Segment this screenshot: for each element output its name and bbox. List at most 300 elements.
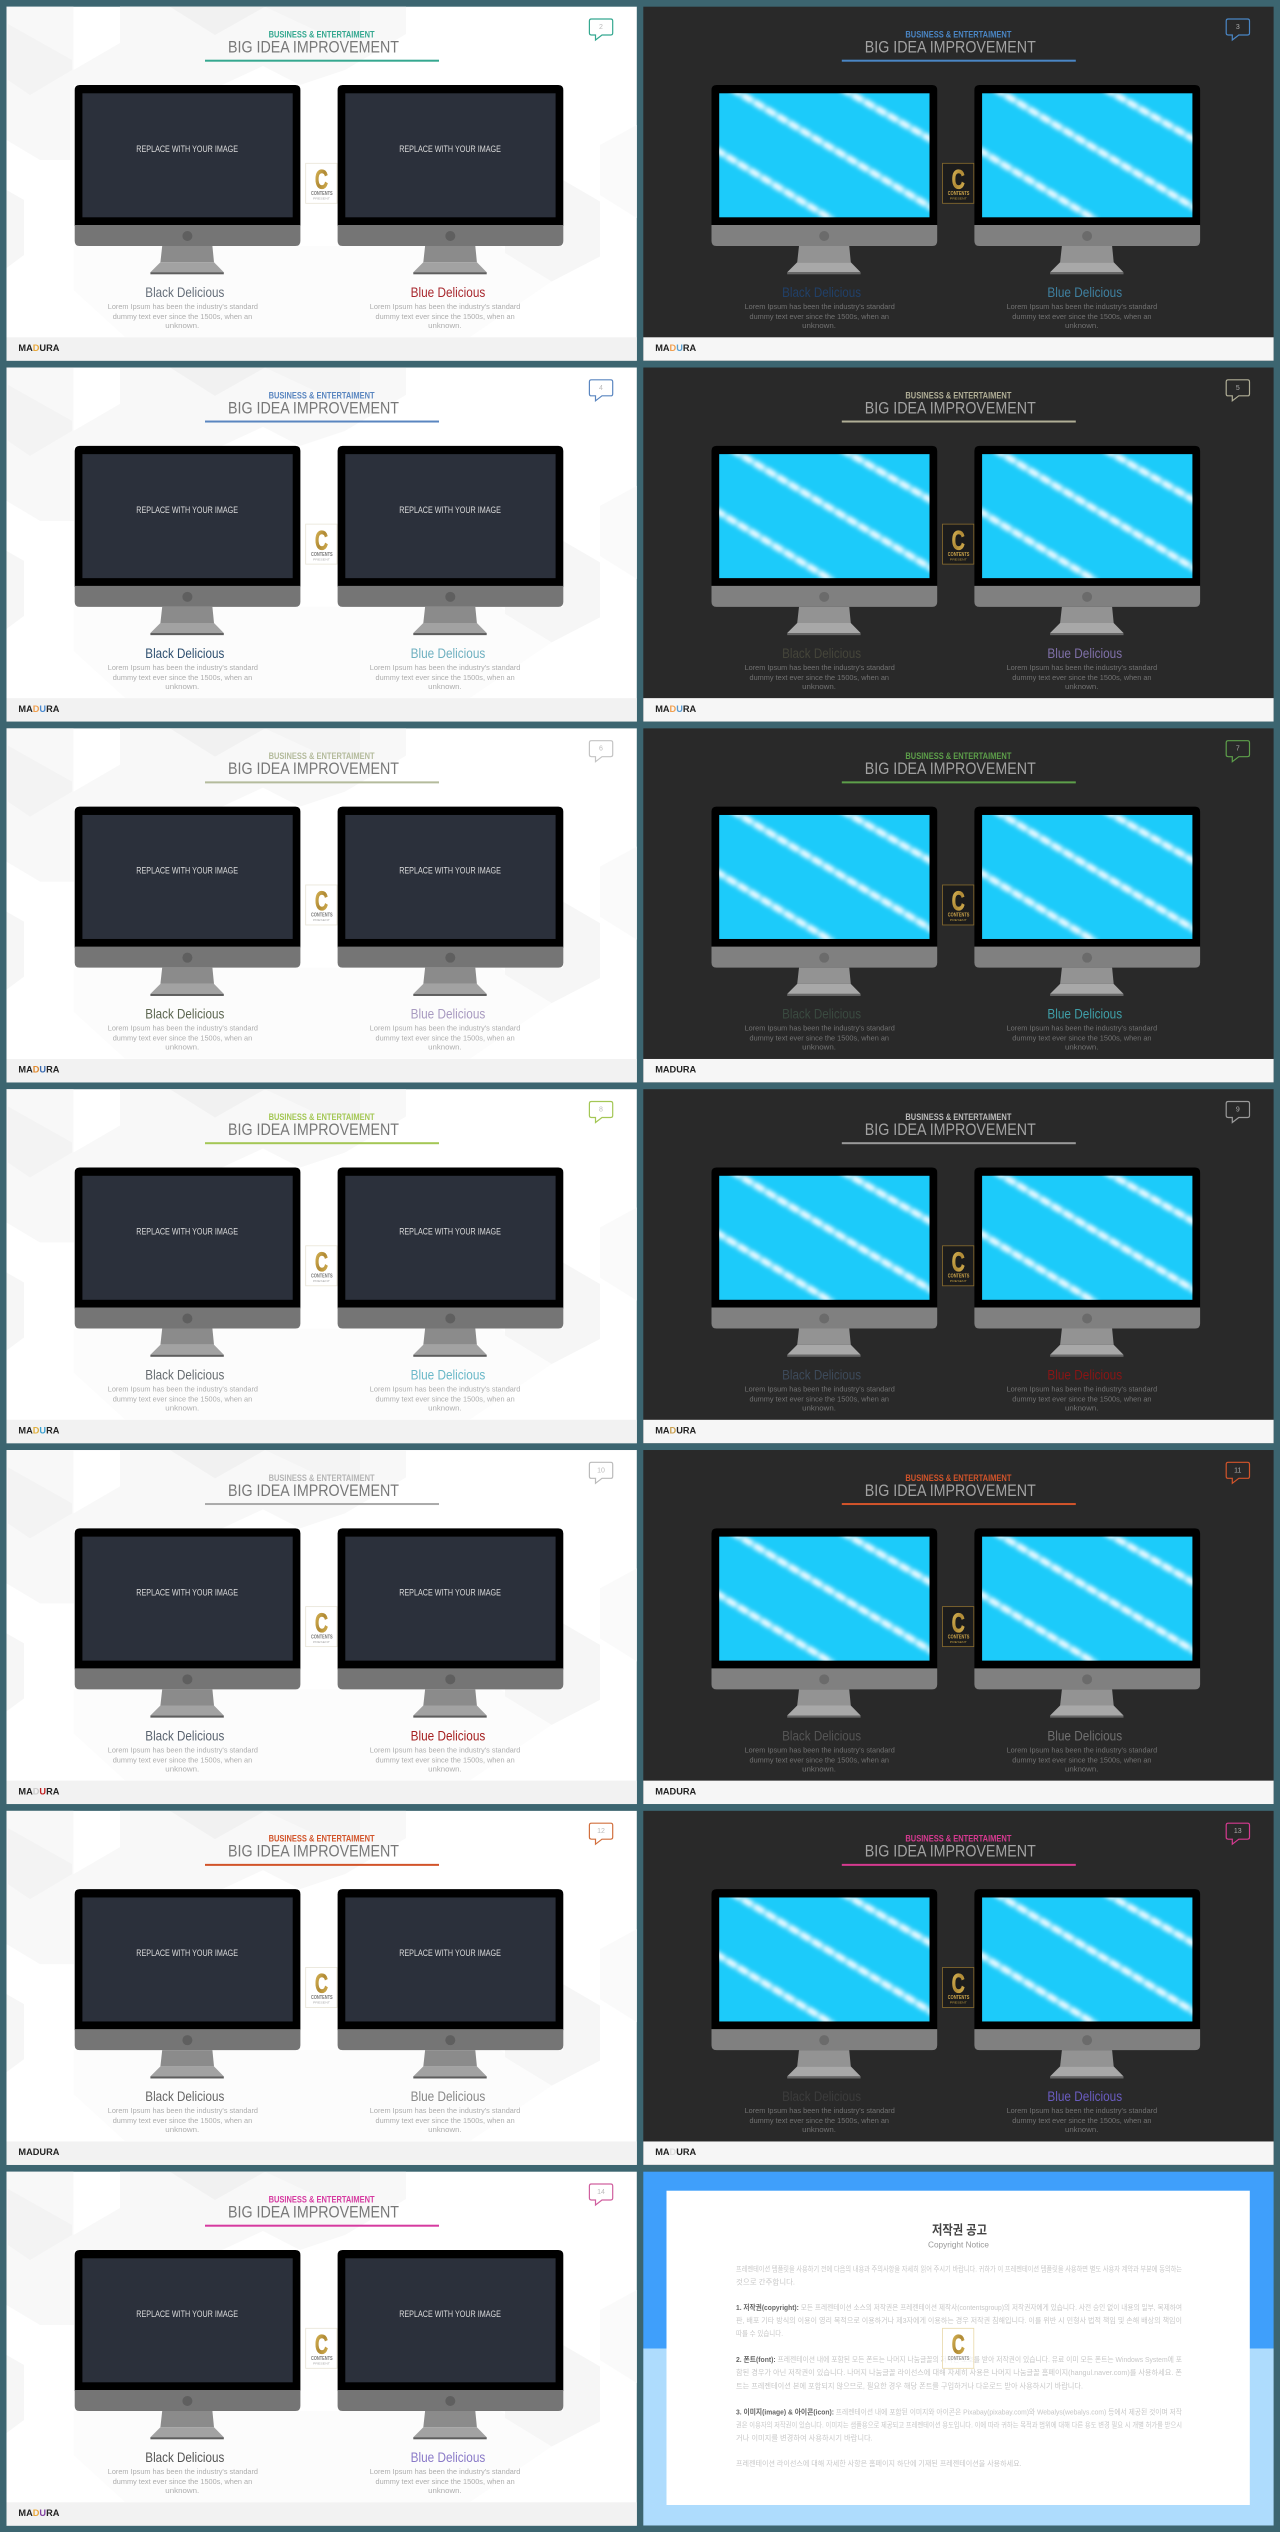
heading: slide 5 title <box>842 390 1076 423</box>
monitor left: REPLACE WITH YOUR IMAGE <box>136 505 238 515</box>
caption right: unknown. <box>428 2486 462 2495</box>
monitor right <box>338 1528 563 1718</box>
caption right: unknown. <box>428 682 462 691</box>
caption right <box>370 1366 520 1412</box>
caption right: Lorem Ipsum has been the industry's standard <box>1007 1384 1157 1394</box>
heading: slide 12 title <box>205 1834 439 1866</box>
icon: contents logo: C <box>952 1247 965 1277</box>
caption right: dummy text ever since the 1500s, when an <box>1012 1034 1152 1043</box>
caption right: dummy text ever since the 1500s, when an <box>376 312 515 321</box>
caption right <box>1007 2088 1157 2134</box>
caption left: Lorem Ipsum has been the industry's standard <box>108 1384 258 1394</box>
heading: slide 7 title: BUSINESS & ENTERTAIMENT <box>905 751 1012 761</box>
icon: contents logo: PRESENT <box>313 557 330 561</box>
icon: page number bubble 8: 8 <box>599 1106 603 1114</box>
caption left: Black Delicious <box>782 284 861 300</box>
caption left <box>108 645 258 691</box>
caption left: dummy text ever since the 1500s, when an <box>113 2116 252 2125</box>
heading: slide 14 title: BUSINESS & ENTERTAIMENT <box>269 2194 375 2204</box>
icon: contents logo <box>942 1607 974 1647</box>
icon: contents logo: C <box>315 886 328 916</box>
caption left: unknown. <box>802 682 836 691</box>
text block: intro <box>736 2264 1182 2286</box>
panel: slide 14 <box>6 2172 637 2526</box>
monitor left <box>712 85 937 274</box>
caption left: dummy text ever since the 1500s, when an <box>113 1394 252 1404</box>
monitor right <box>974 85 1200 274</box>
caption left: dummy text ever since the 1500s, when an <box>113 312 252 321</box>
caption right: Blue Delicious <box>411 2449 485 2465</box>
caption left: unknown. <box>802 2125 836 2134</box>
caption right: dummy text ever since the 1500s, when an <box>376 673 515 682</box>
icon: page number bubble 2 <box>589 19 613 40</box>
monitor right: REPLACE WITH YOUR IMAGE <box>399 144 501 154</box>
monitor left <box>712 446 937 635</box>
heading: slide 12 title: BUSINESS & ENTERTAIMENT <box>269 1834 375 1844</box>
caption left: Black Delicious <box>145 1727 224 1743</box>
caption left <box>745 284 895 330</box>
caption left: unknown. <box>165 1764 199 1773</box>
heading: slide 14 title: BIG IDEA IMPROVEMENT <box>228 2204 399 2222</box>
caption right <box>1007 645 1157 691</box>
caption right: Lorem Ipsum has been the industry's standard <box>370 2467 520 2476</box>
caption left: Black Delicious <box>145 2088 224 2104</box>
caption left: Lorem Ipsum has been the industry's standard <box>745 1745 895 1754</box>
monitor left <box>712 1528 937 1718</box>
monitor right: REPLACE WITH YOUR IMAGE <box>399 2309 501 2319</box>
icon: contents logo: C <box>315 164 328 194</box>
icon: contents logo: CONTENTS <box>311 552 333 558</box>
heading: slide 13 title: BUSINESS & ENTERTAIMENT <box>905 1834 1012 1844</box>
icon: contents logo: PRESENT <box>313 196 330 200</box>
heading: slide 4 title: BUSINESS & ENTERTAIMENT <box>269 390 375 400</box>
text block: intro: 것으로 간주합니다. <box>736 2276 795 2286</box>
heading: slide 11 title: BIG IDEA IMPROVEMENT <box>865 1482 1036 1500</box>
caption right: Blue Delicious <box>1047 2088 1122 2104</box>
caption right: Blue Delicious <box>1047 645 1122 661</box>
panel: slide 5 <box>643 368 1274 722</box>
icon: page number bubble 13: 13 <box>1234 1828 1242 1835</box>
heading: slide 7 title <box>842 751 1076 783</box>
caption left: dummy text ever since the 1500s, when an <box>749 1034 889 1043</box>
caption right: Blue Delicious <box>1047 284 1122 300</box>
monitor right <box>338 85 563 274</box>
heading: slide 2 title: BUSINESS & ENTERTAIMENT <box>269 30 375 40</box>
icon: page number bubble 6 <box>589 741 613 762</box>
caption left <box>108 2088 258 2134</box>
caption left <box>108 1727 258 1773</box>
icon: contents logo <box>942 1967 974 2007</box>
icon: contents logo <box>306 2328 337 2368</box>
caption right: Blue Delicious <box>1047 1366 1122 1382</box>
monitor left: REPLACE WITH YOUR IMAGE <box>136 1226 238 1236</box>
monitor right <box>974 446 1200 635</box>
panel: slide 13 <box>643 1811 1274 2165</box>
icon: page number bubble 9: 9 <box>1236 1106 1240 1114</box>
caption left: Lorem Ipsum has been the industry's standard <box>108 1024 258 1033</box>
icon: page number bubble 5: 5 <box>1236 385 1240 392</box>
icon: page number bubble 9 <box>1226 1102 1250 1122</box>
monitor left: REPLACE WITH YOUR IMAGE <box>136 144 238 154</box>
caption left: unknown. <box>165 682 199 691</box>
caption right: unknown. <box>1065 1043 1098 1052</box>
monitor left <box>75 1889 300 2078</box>
caption left: Black Delicious <box>145 1366 224 1382</box>
footer logo: MADURA <box>655 1426 696 1436</box>
icon: contents logo <box>306 1246 337 1286</box>
caption right: Blue Delicious <box>1047 1006 1122 1022</box>
icon: contents logo: C <box>315 1247 328 1277</box>
monitor right <box>338 446 563 635</box>
icon: contents logo: C <box>315 2330 328 2360</box>
heading: slide 9 title: BUSINESS & ENTERTAIMENT <box>905 1112 1012 1122</box>
caption left: Black Delicious <box>782 1727 861 1743</box>
icon: page number bubble 10: 10 <box>597 1467 605 1474</box>
text block: image and icon clause <box>736 2406 1182 2442</box>
caption right: unknown. <box>1065 1764 1098 1773</box>
footer logo: MADURA <box>18 2508 60 2519</box>
icon: contents logo <box>942 1246 974 1286</box>
caption left: Black Delicious <box>145 1006 224 1022</box>
caption right: dummy text ever since the 1500s, when an <box>1012 2116 1152 2125</box>
caption left <box>745 2088 895 2134</box>
icon: page number bubble 5 <box>1226 380 1250 401</box>
icon: page number bubble 11: 11 <box>1234 1467 1242 1474</box>
panel: white notice card <box>666 2191 1250 2505</box>
caption right <box>370 2449 520 2495</box>
footer logo: MADURA <box>18 1786 60 1797</box>
caption right: unknown. <box>1065 321 1098 330</box>
caption right <box>370 2088 520 2134</box>
icon: page number bubble 7: 7 <box>1236 746 1240 753</box>
icon: contents logo: PRESENT <box>950 1279 967 1283</box>
monitor right <box>338 1889 563 2078</box>
icon: page number bubble 4 <box>589 380 613 401</box>
monitor left <box>75 1168 300 1357</box>
icon: page number bubble 10 <box>589 1462 613 1483</box>
heading: slide 6 title: BIG IDEA IMPROVEMENT <box>228 760 399 778</box>
monitor right: REPLACE WITH YOUR IMAGE <box>399 505 501 515</box>
heading: slide 3 title: BIG IDEA IMPROVEMENT <box>865 38 1036 56</box>
caption right: Blue Delicious <box>411 284 485 300</box>
caption left: dummy text ever since the 1500s, when an <box>749 1755 889 1764</box>
caption right: dummy text ever since the 1500s, when an <box>376 1755 515 1764</box>
heading: slide 3 title: BUSINESS & ENTERTAIMENT <box>905 30 1012 40</box>
text block: font clause: 함된 경우가 아닌 저작권이 있습니다. 나머지 나눔글꼴 라이선스에 대해 자세히 사용은 나머지 나눔글꼴 홈페이지(hangul.naver.com)를 사용하세요. 폰 <box>736 2367 1182 2377</box>
text block: image and icon clause: 3. 이미지(image) & 아이콘(icon): 프레젠테이션 내에 포함된 이미지와 아이콘은 Pixabay(pixabay.com)와 Webalys(webalys.com) 등에서 제공된 것이며 저작 <box>736 2406 1182 2416</box>
caption right: Blue Delicious <box>411 1006 485 1022</box>
text block: image and icon clause: 권은 이용자의 저작권이 있습니다. 이미지는 샘플용으로 제공되고 프레젠테이션 용도입니다. 이에 따라 귀하는 목적과 범위에 대해 다른 용도 변경 필요 시 개별 허가를 받으시 <box>736 2420 1182 2430</box>
caption left: unknown. <box>802 1043 836 1052</box>
footer logo: MADURA <box>18 704 60 715</box>
icon: page number bubble 13 <box>1226 1823 1250 1844</box>
footer logo: MADURA <box>18 343 60 354</box>
caption left: Black Delicious <box>782 1366 861 1382</box>
caption right: Blue Delicious <box>411 1366 485 1382</box>
heading: slide 7 title: BIG IDEA IMPROVEMENT <box>865 760 1036 778</box>
text block: image and icon clause: 거나 이미지를 변경하여 사용하시기 바랍니다. <box>736 2432 873 2442</box>
icon: contents logo: CONTENTS <box>948 913 970 919</box>
caption right: Lorem Ipsum has been the industry's standard <box>1007 302 1157 311</box>
heading: slide 2 title <box>205 30 439 62</box>
heading: slide 13 title: BIG IDEA IMPROVEMENT <box>865 1843 1036 1861</box>
panel: slide 9 <box>643 1089 1274 1443</box>
icon: contents logo <box>306 163 337 203</box>
caption left: Black Delicious <box>145 284 224 300</box>
icon: page number bubble 3 <box>1226 19 1250 40</box>
panel: slide 11 <box>643 1450 1274 1804</box>
caption right <box>370 1006 520 1052</box>
caption left: unknown. <box>165 1404 199 1412</box>
monitor right: REPLACE WITH YOUR IMAGE <box>399 1226 501 1236</box>
caption right: unknown. <box>1065 682 1098 691</box>
caption left: Lorem Ipsum has been the industry's standard <box>745 302 895 311</box>
footer logo: MADURA <box>18 1065 60 1076</box>
icon: contents logo: PRESENT <box>313 918 330 922</box>
heading: slide 9 title: BIG IDEA IMPROVEMENT <box>865 1121 1036 1139</box>
caption right: unknown. <box>428 1764 462 1773</box>
text block: copyright clause: 판, 배포 기타 방식의 이용이 영리 목적으로 이용하거나 제3자에게 이용하는 경우 저작권 침해입니다. 이를 위반 시 민형사 법적 책임 및 손해 배상의 책임이 <box>736 2315 1182 2325</box>
monitor right: REPLACE WITH YOUR IMAGE <box>399 1587 501 1597</box>
caption left <box>108 1006 258 1052</box>
caption left: dummy text ever since the 1500s, when an <box>113 1034 252 1043</box>
caption right: dummy text ever since the 1500s, when an <box>1012 1394 1152 1404</box>
monitor left: REPLACE WITH YOUR IMAGE <box>136 866 238 876</box>
caption right: dummy text ever since the 1500s, when an <box>376 2477 515 2486</box>
caption left: unknown. <box>165 1043 199 1052</box>
heading: slide 10 title: BIG IDEA IMPROVEMENT <box>228 1482 399 1500</box>
text block: copyright clause: 1. 저작권(copyright): 모든 프레젠테이션 소스의 저작권은 프레젠테이션 제작사(contentsgroup)의 저작권자에게 있습니다. 사전 승인 없이 내용의 일부, 복제하여 <box>736 2302 1182 2312</box>
caption left: Black Delicious <box>145 645 224 661</box>
heading: slide 10 title: BUSINESS & ENTERTAIMENT <box>269 1473 375 1483</box>
panel: slide 12 <box>6 1811 637 2165</box>
caption right: Lorem Ipsum has been the industry's standard <box>370 1384 520 1394</box>
panel: slide 10 <box>6 1450 637 1804</box>
text block: intro: 프레젠테이션 템플릿을 사용하기 전에 다음의 내용과 주의사항을 자세히 읽어 주시기 바랍니다. 귀하가 이 프레젠테이션 템플릿을 사용하면 별도 사용자 계약과 부분에 동의하는 <box>736 2264 1182 2274</box>
icon: contents logo: CONTENTS <box>311 191 333 197</box>
caption left: Black Delicious <box>782 645 861 661</box>
heading: slide 4 title: BIG IDEA IMPROVEMENT <box>228 399 399 417</box>
icon: contents logo: CONTENTS <box>311 1634 333 1640</box>
caption left: dummy text ever since the 1500s, when an <box>113 2477 252 2486</box>
caption left: dummy text ever since the 1500s, when an <box>749 312 889 321</box>
monitor left: REPLACE WITH YOUR IMAGE <box>136 1948 238 1958</box>
caption left: dummy text ever since the 1500s, when an <box>749 673 889 682</box>
caption left: Lorem Ipsum has been the industry's standard <box>108 302 258 311</box>
icon: contents logo: C <box>952 1969 965 1999</box>
caption left <box>745 1727 895 1773</box>
caption left: dummy text ever since the 1500s, when an <box>749 2116 889 2125</box>
caption right: dummy text ever since the 1500s, when an <box>1012 312 1152 321</box>
icon: contents logo: C <box>952 2330 965 2360</box>
caption left: unknown. <box>165 321 199 330</box>
icon: contents logo: CONTENTS <box>948 2356 970 2362</box>
heading: slide 6 title: BUSINESS & ENTERTAIMENT <box>269 751 375 761</box>
caption right: Lorem Ipsum has been the industry's standard <box>370 1745 520 1754</box>
heading: slide 8 title: BIG IDEA IMPROVEMENT <box>228 1121 399 1139</box>
panel: slide 8 <box>6 1089 637 1443</box>
icon: contents logo: C <box>952 525 965 555</box>
caption left <box>745 1006 895 1052</box>
icon: contents logo: CONTENTS <box>311 2356 333 2362</box>
icon: page number bubble 8 <box>589 1102 613 1122</box>
caption right: Lorem Ipsum has been the industry's standard <box>1007 663 1157 672</box>
monitor left <box>75 85 300 274</box>
heading: slide 6 title <box>205 751 439 783</box>
caption left: dummy text ever since the 1500s, when an <box>113 673 252 682</box>
icon: page number bubble 6: 6 <box>599 746 603 753</box>
caption right: Lorem Ipsum has been the industry's standard <box>370 663 520 672</box>
caption left: Black Delicious <box>145 2449 224 2465</box>
caption right: dummy text ever since the 1500s, when an <box>376 2116 515 2125</box>
icon: contents logo: C <box>952 164 965 194</box>
caption left: Black Delicious <box>782 2088 861 2104</box>
caption left: Black Delicious <box>782 1006 861 1022</box>
icon: contents logo: PRESENT <box>950 557 967 561</box>
caption right: dummy text ever since the 1500s, when an <box>1012 673 1152 682</box>
panel: copyright notice slide <box>643 2172 1274 2526</box>
monitor left <box>712 807 937 996</box>
monitor right: REPLACE WITH YOUR IMAGE <box>399 1948 501 1958</box>
monitor right <box>974 807 1200 996</box>
caption right <box>370 645 520 691</box>
caption right: dummy text ever since the 1500s, when an <box>376 1034 515 1043</box>
icon: page number bubble 12 <box>589 1823 613 1844</box>
icon: contents logo: CONTENTS <box>311 1274 333 1280</box>
icon: contents logo: PRESENT <box>313 1279 330 1283</box>
caption left: Lorem Ipsum has been the industry's standard <box>108 2467 258 2476</box>
monitor right: REPLACE WITH YOUR IMAGE <box>399 866 501 876</box>
heading: slide 11 title: BUSINESS & ENTERTAIMENT <box>905 1473 1012 1483</box>
caption right: Lorem Ipsum has been the industry's standard <box>1007 1024 1157 1033</box>
caption left <box>745 1366 895 1412</box>
caption right <box>1007 1366 1157 1412</box>
caption left: Lorem Ipsum has been the industry's standard <box>745 1024 895 1033</box>
caption right <box>1007 284 1157 330</box>
caption left <box>108 2449 258 2495</box>
panel: slide 3 <box>643 7 1274 361</box>
panel: slide 7 <box>643 728 1274 1082</box>
heading: copyright title: 저작권 공고 <box>932 2222 987 2238</box>
icon: contents logo: CONTENTS <box>311 913 333 919</box>
heading: slide 3 title <box>842 30 1076 62</box>
caption right: Blue Delicious <box>411 2088 485 2104</box>
caption right: unknown. <box>428 2125 462 2134</box>
caption right <box>370 284 520 330</box>
monitor right <box>338 1168 563 1357</box>
caption right: Blue Delicious <box>1047 1727 1122 1743</box>
icon: contents logo: PRESENT <box>313 2001 330 2005</box>
monitor right <box>338 2250 563 2439</box>
icon: contents logo <box>306 885 337 925</box>
icon: contents logo: CONTENTS <box>948 552 970 558</box>
heading: slide 8 title <box>205 1112 439 1144</box>
icon: contents logo: C <box>315 1969 328 1999</box>
panel: slide 2 <box>6 7 637 361</box>
icon: page number bubble 12: 12 <box>597 1828 605 1835</box>
caption right <box>1007 1006 1157 1052</box>
icon: contents logo: PRESENT <box>950 196 967 200</box>
heading: slide 14 title <box>205 2194 439 2227</box>
heading: slide 11 title <box>842 1473 1076 1505</box>
caption left: Lorem Ipsum has been the industry's standard <box>108 2106 258 2115</box>
caption right: unknown. <box>1065 2125 1098 2134</box>
heading: slide 8 title: BUSINESS & ENTERTAIMENT <box>269 1112 375 1122</box>
icon: contents logo <box>942 2328 974 2368</box>
monitor left: REPLACE WITH YOUR IMAGE <box>136 2309 238 2319</box>
monitor left <box>75 446 300 635</box>
heading: slide 5 title: BIG IDEA IMPROVEMENT <box>865 399 1036 417</box>
caption right: Lorem Ipsum has been the industry's standard <box>370 2106 520 2115</box>
caption right: unknown. <box>428 321 462 330</box>
caption left: unknown. <box>165 2125 199 2134</box>
icon: page number bubble 4: 4 <box>599 385 603 392</box>
panel: slide 4 <box>6 368 637 722</box>
heading: slide 4 title <box>205 390 439 423</box>
caption left: Lorem Ipsum has been the industry's standard <box>108 663 258 672</box>
icon: contents logo: PRESENT <box>313 2362 330 2366</box>
monitor left <box>712 1168 937 1357</box>
caption right: Blue Delicious <box>411 1727 485 1743</box>
icon: contents logo <box>306 1967 337 2007</box>
caption right: Lorem Ipsum has been the industry's standard <box>1007 2106 1157 2115</box>
caption left: Lorem Ipsum has been the industry's standard <box>745 2106 895 2115</box>
icon: contents logo <box>306 524 337 564</box>
icon: contents logo: CONTENTS <box>948 1274 970 1280</box>
icon: page number bubble 3: 3 <box>1236 24 1240 31</box>
icon: page number bubble 14 <box>589 2184 613 2205</box>
heading: slide 2 title: BIG IDEA IMPROVEMENT <box>228 38 399 56</box>
monitor left: REPLACE WITH YOUR IMAGE <box>136 1587 238 1597</box>
monitor left <box>712 1889 937 2078</box>
footer logo: MADURA <box>655 1065 696 1076</box>
icon: contents logo: PRESENT <box>950 918 967 922</box>
footer logo: MADURA <box>18 1426 60 1436</box>
icon: contents logo <box>942 163 974 203</box>
footer logo: MADURA <box>655 343 696 354</box>
icon: contents logo: PRESENT <box>950 1640 967 1644</box>
text block: font clause <box>736 2354 1182 2390</box>
heading: copyright title: Copyright Notice <box>928 2240 989 2250</box>
heading: slide 13 title <box>842 1834 1076 1866</box>
caption right: unknown. <box>1065 1404 1098 1412</box>
caption right <box>1007 1727 1157 1773</box>
text block: font clause: 트는 프레젠테이션 본에 포함되지 않으므로, 필요한 경우 해당 폰트를 구입하거나 다운로드 받아 사용하시기 바랍니다. <box>736 2380 1083 2390</box>
icon: page number bubble 7 <box>1226 741 1250 762</box>
icon: contents logo: PRESENT <box>950 2001 967 2005</box>
icon: contents logo <box>942 885 974 925</box>
caption left: Lorem Ipsum has been the industry's standard <box>745 663 895 672</box>
monitor right <box>974 1528 1200 1718</box>
caption left: dummy text ever since the 1500s, when an <box>749 1394 889 1404</box>
monitor left <box>75 807 300 996</box>
monitor right <box>338 807 563 996</box>
icon: contents logo: C <box>315 1608 328 1638</box>
footer logo: MADURA <box>655 2147 696 2158</box>
icon: contents logo: CONTENTS <box>948 191 970 197</box>
icon: contents logo: PRESENT <box>313 1640 330 1644</box>
monitor left <box>75 2250 300 2439</box>
monitor right <box>974 1889 1200 2078</box>
footer logo: MADURA <box>655 1786 696 1797</box>
icon: contents logo <box>942 524 974 564</box>
icon: contents logo: C <box>952 1608 965 1638</box>
footer logo: MADURA <box>18 2147 60 2158</box>
monitor right <box>974 1168 1200 1357</box>
text block: font clause: 2. 폰트(font): 프레젠테이션 내에 포함된 모든 폰트는 나머지 나눔글꼴의 저작권 보호를 받아 저작권이 있습니다. 유료 이미 모든 폰트는 Windows System에 포 <box>736 2354 1182 2364</box>
icon: page number bubble 11 <box>1226 1462 1250 1483</box>
icon: contents logo: CONTENTS <box>948 1634 970 1640</box>
